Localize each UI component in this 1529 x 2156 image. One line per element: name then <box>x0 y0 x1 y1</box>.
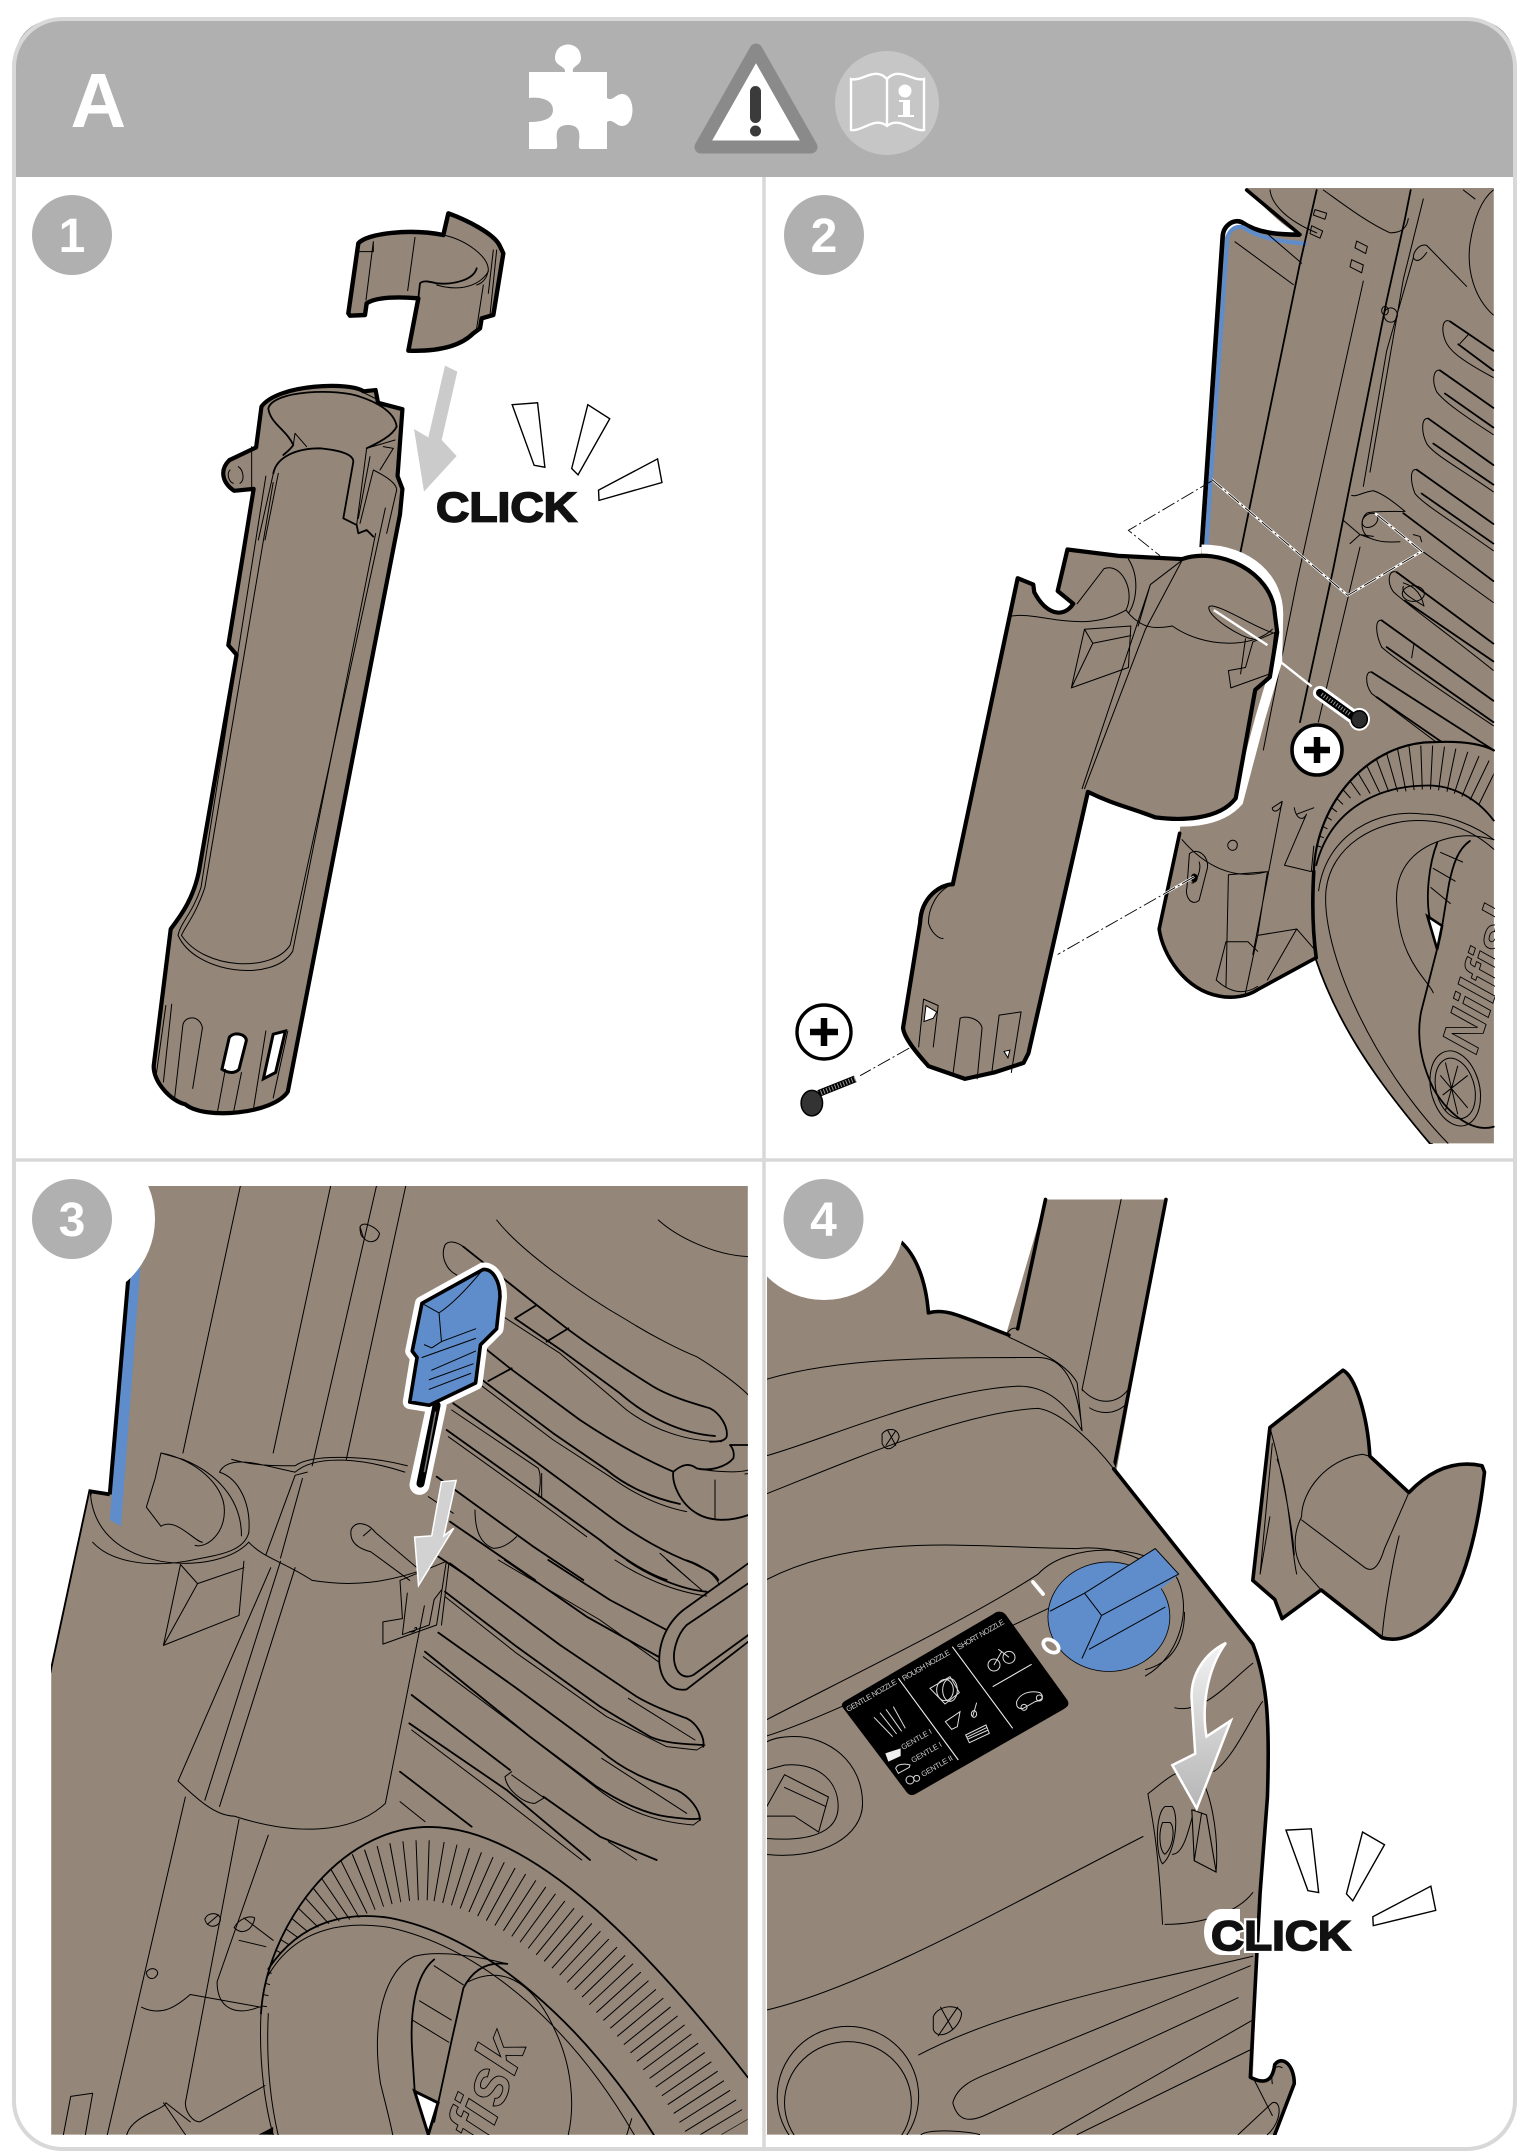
valve marker <box>1427 916 1442 949</box>
icon: puzzle piece <box>529 44 632 149</box>
step number 2 <box>784 195 864 275</box>
blue key <box>410 1269 500 1485</box>
label text: GENTLE I <box>910 1740 943 1765</box>
label text <box>844 1617 1006 1779</box>
step number 1 <box>32 195 112 275</box>
step number 2: 2 <box>811 210 837 263</box>
click label: CLICK <box>1211 1912 1351 1959</box>
step number 4: 4 <box>810 1194 837 1247</box>
step number 3 <box>32 1179 112 1259</box>
knob positions <box>1033 1582 1061 1655</box>
holder with halo <box>903 549 1278 1079</box>
machine silhouette <box>1159 188 1494 1143</box>
assembly lines <box>860 479 1422 1076</box>
label text: GENTLE NOZZLE <box>844 1677 898 1714</box>
vents upper <box>428 1220 750 1580</box>
blue side strip <box>51 1265 140 1673</box>
bolt hole <box>1191 873 1198 882</box>
click label: CLICK <box>436 484 577 530</box>
click label: CLICK <box>1211 1912 1351 1959</box>
gentle nozzle spray <box>874 1707 905 1737</box>
arrow curved into catch <box>1172 1643 1231 1808</box>
header letter A: A <box>70 58 126 144</box>
label plate <box>842 1612 1068 1795</box>
wheel logo <box>1429 1050 1482 1126</box>
clip piece <box>348 213 503 351</box>
panel 2: holder fixed to machine <box>801 188 1529 1143</box>
header band <box>14 19 1515 177</box>
click sparks <box>512 403 662 500</box>
rotary knob <box>1048 1549 1180 1672</box>
hook accessory <box>1253 1370 1485 1639</box>
vents <box>1343 321 1493 750</box>
label text: GENTLE I <box>900 1727 933 1752</box>
step number 4 <box>784 1179 864 1259</box>
tube top detail <box>228 392 397 540</box>
handle tube <box>1004 1199 1166 1472</box>
machine column lines <box>1235 190 1493 750</box>
label text: ROUGH NOZZLE <box>900 1648 952 1683</box>
panel 1: tube and clip <box>32 195 662 1114</box>
screw right <box>1320 693 1370 731</box>
arrow down into holder <box>415 1480 456 1586</box>
tube body <box>154 386 402 1114</box>
settings label <box>842 1612 1068 1795</box>
step number 1: 1 <box>59 210 85 263</box>
label dividers <box>898 1647 1032 1760</box>
screw left <box>801 1079 855 1116</box>
side catch <box>1148 1771 1217 1924</box>
tube slots <box>222 1034 246 1072</box>
panel 3: fitting key <box>32 1179 748 2135</box>
label text: SHORT NOZZLE <box>956 1617 1006 1652</box>
step number 3: 3 <box>59 1194 85 1247</box>
machine lines <box>63 1185 406 2135</box>
tool: screwdriver symbol right <box>1292 725 1342 775</box>
car and bike icons <box>896 1649 1042 1784</box>
panel 4: final fit <box>765 1199 1485 2156</box>
label text: GENTLE II <box>920 1753 954 1779</box>
icon: manual with info sign <box>835 51 939 155</box>
machine body <box>765 1242 1294 2156</box>
valve marker <box>415 2091 438 2135</box>
vents lower <box>400 1560 748 1860</box>
wheel <box>1313 742 1497 1143</box>
wheel <box>259 1827 748 2135</box>
wheel brand text: fisk <box>432 2019 542 2151</box>
tool: screwdriver symbol left <box>797 1005 851 1059</box>
brush icon <box>885 1748 901 1762</box>
icon: warning triangle <box>701 50 811 147</box>
blue side strip and top edge <box>1202 190 1307 547</box>
machine background <box>51 1185 748 2135</box>
click sparks <box>1286 1829 1436 1926</box>
white corner behind badge 3 <box>0 1136 155 1302</box>
holder <box>51 1453 449 1829</box>
white corner behind badge 4 <box>767 1240 902 1300</box>
arrow: insert clip <box>414 366 457 492</box>
